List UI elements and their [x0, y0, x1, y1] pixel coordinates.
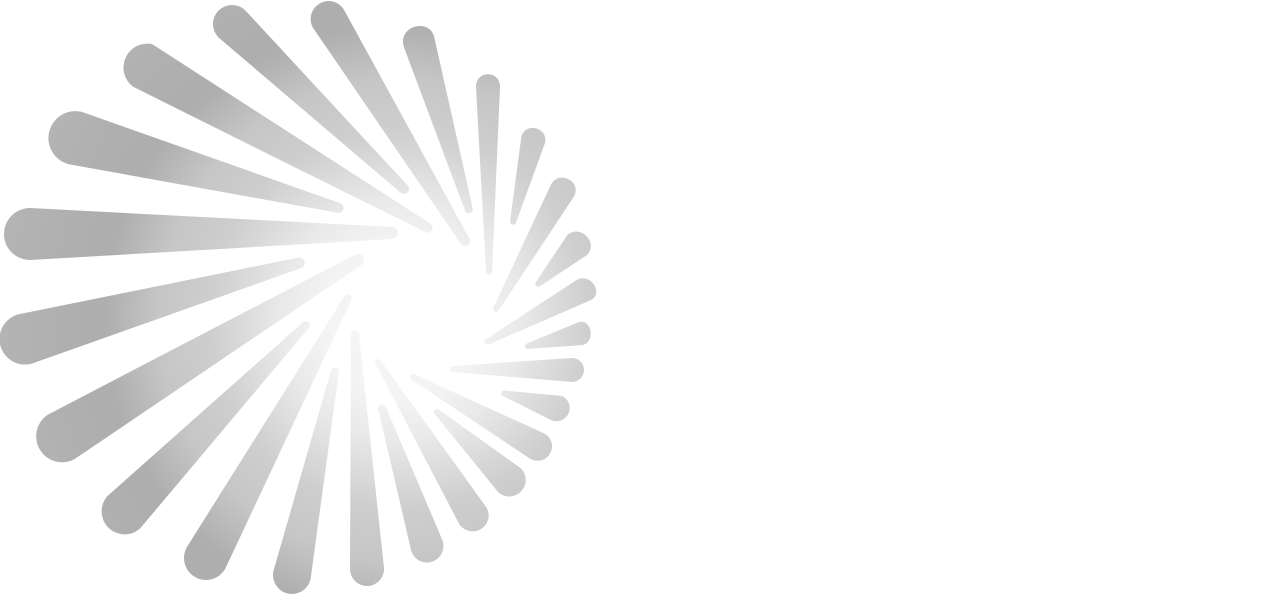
ray 2 — [48, 111, 343, 213]
ray 24 — [0, 257, 305, 365]
ray 22 — [102, 321, 310, 534]
ray 13 — [450, 358, 584, 382]
ray 3 — [123, 44, 433, 233]
ray 6 — [403, 26, 473, 213]
ray 14 — [501, 390, 570, 421]
ray 18 — [378, 404, 444, 563]
ray 8 — [510, 128, 545, 225]
ray 15 — [410, 374, 552, 461]
ray 17 — [375, 359, 489, 531]
ray 7 — [476, 74, 500, 275]
ray 16 — [434, 409, 526, 496]
ray 12 — [525, 322, 591, 349]
ray 20 — [273, 367, 339, 594]
ray 1 — [4, 208, 398, 260]
ray 21 — [184, 294, 352, 580]
ray 9 — [493, 178, 576, 312]
ray 5 — [311, 1, 470, 246]
ray 10 — [535, 232, 591, 287]
ray 23 — [36, 254, 364, 462]
ray 11 — [484, 278, 596, 345]
ray 4 — [213, 5, 409, 194]
ray 19 — [350, 330, 384, 586]
